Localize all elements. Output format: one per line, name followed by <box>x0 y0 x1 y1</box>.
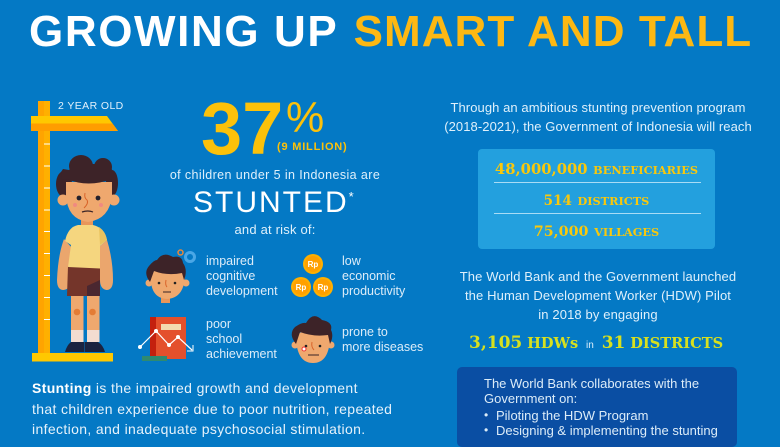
panel: World Bank collaboration: Government on: <box>484 391 577 406</box>
stunted text block: and at risk of: <box>234 222 316 237</box>
big stat 37%: % <box>286 94 324 142</box>
program intro <box>444 100 752 134</box>
panel: World Bank collaboration: • <box>484 408 488 422</box>
risk label: diseases: prone to <box>342 325 388 339</box>
risk label: diseases: more diseases <box>342 340 423 354</box>
panel: World Bank collaboration: Designing & implementing the stunting <box>496 423 718 438</box>
icon: Rp coins <box>291 254 333 297</box>
program intro: (2018-2021), the Government of Indonesia will reach <box>444 119 752 134</box>
height chart with child illustration <box>31 101 120 362</box>
risk label: school: achievement <box>206 347 277 361</box>
panel: World Bank collaboration: Piloting the HDW Program <box>496 408 648 423</box>
stunted text block: of children under 5 in Indonesia are <box>170 168 380 182</box>
risk label: productivity: low <box>342 254 361 268</box>
icon: Rp coins: Rp <box>308 260 318 269</box>
age label: 2 YEAR OLD <box>58 100 124 112</box>
stunted text block: STUNTED* <box>193 186 356 219</box>
stunting definition: infection, and inadequate psychosocial stimulation. <box>32 421 366 437</box>
stunting definition: Stunting is the impaired growth and development <box>32 380 358 396</box>
HDW text: in 2018 by engaging <box>538 307 658 322</box>
villages: 75,000 VILLAGES <box>534 224 659 240</box>
risk label: cognitive: impaired <box>206 254 254 268</box>
big stat 37% <box>201 87 348 170</box>
title: GROWING UP SMART AND TALL <box>29 7 752 56</box>
stunting definition: that children experience due to poor nutrition, repeated <box>32 400 392 416</box>
HDW text <box>460 269 736 322</box>
risk label: school: school <box>206 332 242 346</box>
risk label: school: poor <box>206 317 231 331</box>
risk label: cognitive: cognitive <box>206 269 255 283</box>
risk label: productivity: productivity <box>342 284 405 298</box>
stunting definition <box>32 380 392 437</box>
risk label: productivity <box>342 254 406 298</box>
HDW stat: 3,105 HDWs in 31 DISTRICTS <box>469 333 723 353</box>
panel: targets <box>478 149 715 249</box>
icon: Rp coins: Rp <box>296 283 306 292</box>
panel: World Bank collaboration: • <box>484 423 488 437</box>
risk label: cognitive <box>206 254 278 298</box>
stunted text block <box>170 168 380 237</box>
child <box>56 155 120 352</box>
icon: cognitive head <box>146 250 194 303</box>
icon: Rp coins: Rp <box>318 283 328 292</box>
HDW text: the Human Development Worker (HDW) Pilot <box>465 288 731 303</box>
big stat 37%: (9 MILLION) <box>277 141 348 153</box>
big stat 37%: 37 <box>201 87 283 170</box>
risk label: school <box>206 317 277 361</box>
beneficiaries: 48,000,000 BENEFICIARIES <box>495 161 698 178</box>
panel: World Bank collaboration: The World Bank collaborates with the <box>484 376 699 391</box>
HDW text: The World Bank and the Government launched <box>460 269 736 284</box>
risk icons <box>138 249 334 363</box>
panel: World Bank collaboration <box>457 367 737 447</box>
ruler <box>31 101 118 362</box>
icon: book with chart <box>138 317 193 361</box>
program intro: Through an ambitious stunting prevention program <box>450 100 746 115</box>
risk label: diseases <box>342 325 423 354</box>
districts: 514 DISTRICTS <box>544 193 649 209</box>
icon: sick head <box>292 316 334 363</box>
risk label: productivity: economic <box>342 269 396 283</box>
risk label: cognitive: development <box>206 284 278 298</box>
